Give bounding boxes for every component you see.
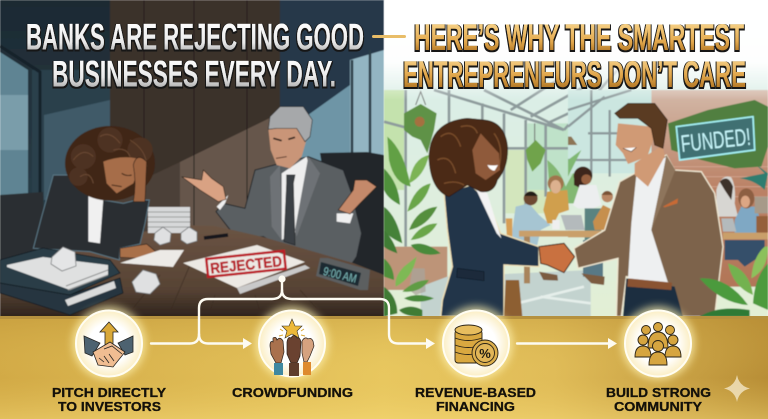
foreground plant [700, 247, 768, 317]
greenhouse frame [384, 70, 617, 247]
step 4: build strong community: BUILD STRONG [606, 385, 711, 400]
icon: handshake with up arrow [84, 322, 133, 367]
stressed businesswoman [33, 126, 162, 260]
step 1: pitch directly to investors [52, 306, 166, 414]
low wall and floor [384, 247, 447, 290]
small document [120, 250, 184, 267]
desk [0, 225, 384, 317]
step 1: pitch directly to investors: TO INVESTORS [58, 399, 161, 414]
sparkle watermark [724, 375, 750, 402]
background team [568, 150, 768, 285]
step 1: pitch directly to investors: PITCH DIRECTLY [52, 385, 166, 400]
foreground plant [384, 137, 441, 317]
white fade behind heading [384, 0, 768, 100]
icon: raised hands and star [270, 319, 314, 376]
boss office chair [320, 152, 384, 280]
neon FUNDED sign [668, 100, 768, 168]
step 2: crowdfunding: CROWDFUNDING [232, 385, 353, 400]
heading: banks are rejecting good businesses every day: BUSINESSES EVERY DAY. [52, 54, 336, 94]
step 4: build strong community [606, 306, 711, 414]
wood wall panel [110, 0, 280, 240]
panel: funded coworking scene [384, 0, 768, 317]
pen [204, 235, 228, 238]
behind plant [547, 153, 584, 203]
man figure [574, 103, 723, 317]
bottom gold band [0, 316, 768, 419]
step 3: revenue-based financing [415, 306, 536, 414]
heading: banks are rejecting good businesses every day: BANKS ARE REJECTING GOOD [26, 16, 364, 58]
rejected letter with red stamp [183, 245, 310, 294]
alarm clock: 9:00 AM [322, 264, 358, 286]
stack of papers [148, 207, 190, 233]
icon: group of people [635, 322, 681, 365]
divider dash between headings [372, 35, 406, 38]
flow connector arrows [151, 275, 617, 349]
icon: coin stack with percent: % [479, 346, 491, 361]
step 2: crowdfunding [232, 306, 353, 400]
crumpled paper balls [132, 227, 197, 294]
heading: banks are rejecting good businesses every day [26, 16, 364, 94]
smiling businesswoman [429, 118, 539, 317]
businessman shrugging [182, 107, 377, 267]
panel: rejected at the bank office scene [0, 0, 384, 317]
heading: here's why the smartest entrepreneurs don't care [403, 17, 746, 95]
woman chair [0, 192, 45, 262]
pendant lamp shade [568, 137, 577, 145]
background team [506, 168, 584, 283]
handshake [539, 243, 575, 273]
man in tan blazer and brick wall [568, 90, 768, 317]
document tray [0, 247, 123, 315]
alarm clock [316, 258, 370, 290]
hanging plants [404, 92, 546, 172]
step 3: revenue-based financing: REVENUE-BASED [415, 385, 536, 400]
step 3: revenue-based financing: FINANCING [436, 399, 515, 414]
step 4: build strong community: COMMUNITY [614, 399, 702, 414]
rejected letter with red stamp: REJECTED [209, 253, 283, 278]
